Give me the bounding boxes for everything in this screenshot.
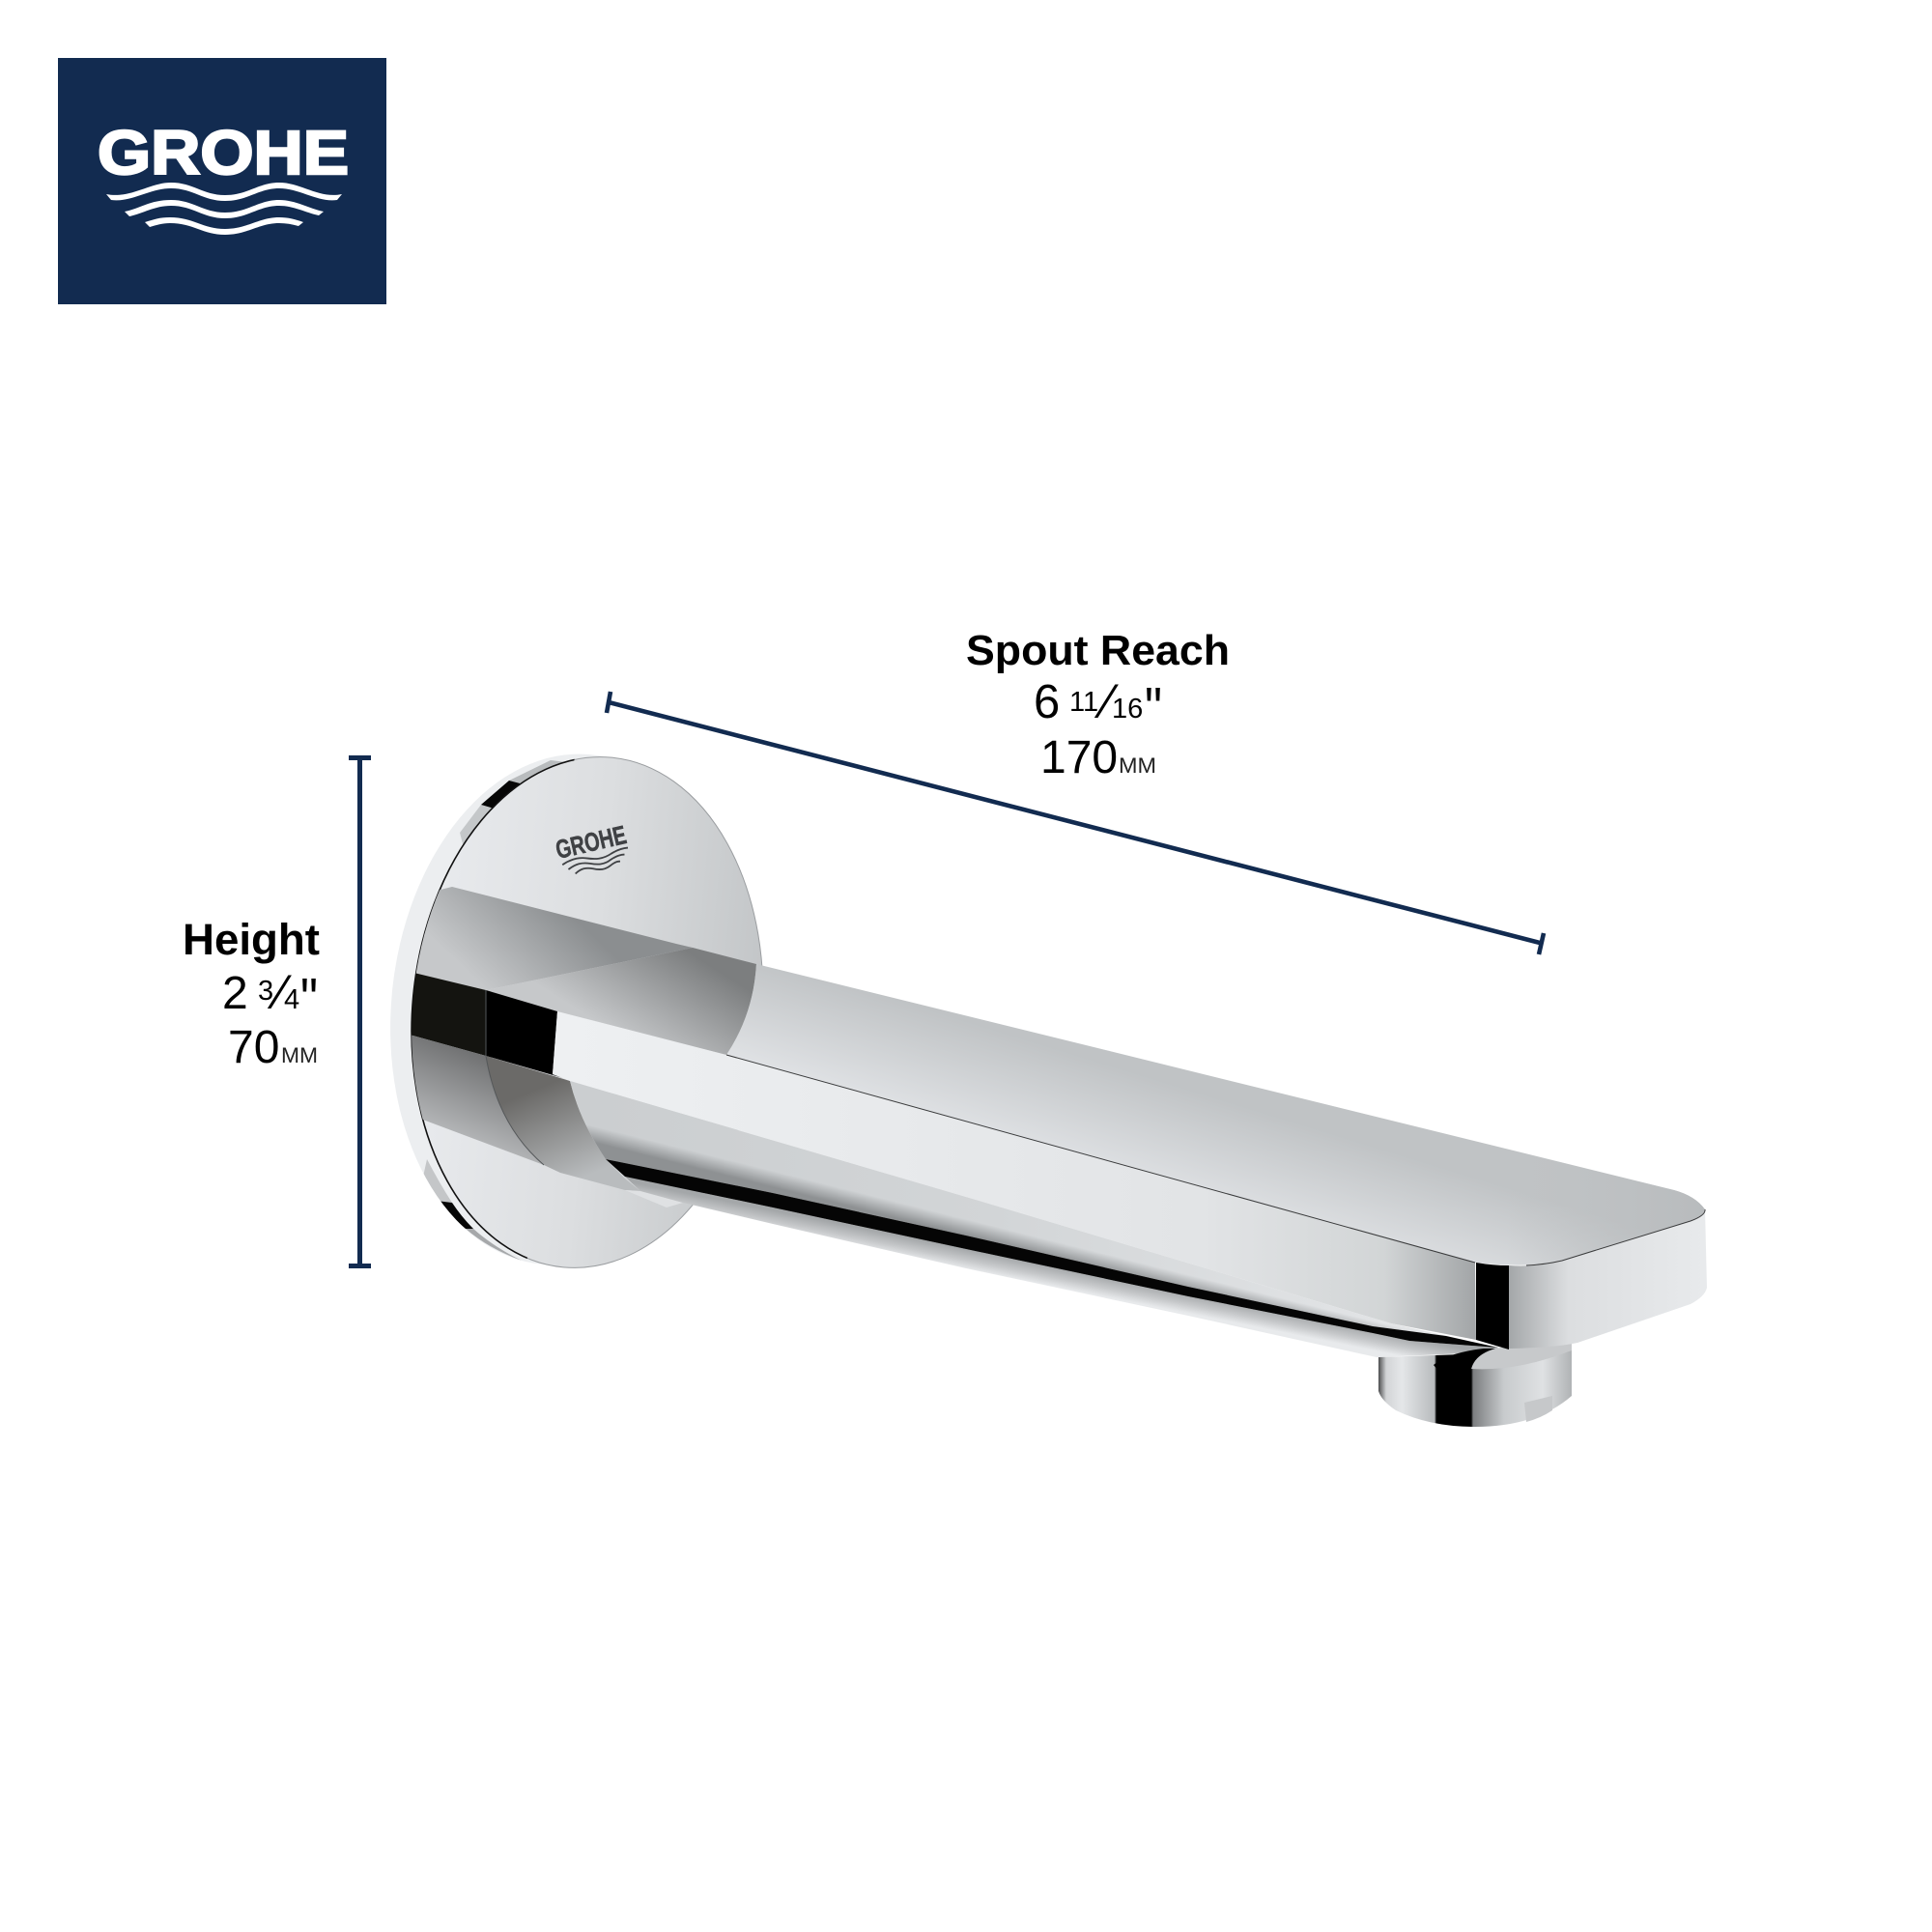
reach in inches: ⁄ bbox=[1094, 674, 1119, 728]
edge lines bbox=[726, 1055, 1705, 1265]
height in inches bbox=[222, 965, 318, 1034]
reach in inches: 16 bbox=[1112, 694, 1143, 724]
spout front face bbox=[553, 1011, 1476, 1340]
reach in inches: 11 bbox=[1069, 687, 1098, 718]
spout lower face bbox=[570, 1081, 1498, 1348]
reach in inches bbox=[1034, 674, 1162, 743]
spout top face bbox=[726, 964, 1705, 1265]
product: chrome tub spout bbox=[368, 738, 1707, 1427]
height dimension bracket bbox=[349, 755, 371, 1268]
plate logo bbox=[553, 820, 633, 878]
reach in inches: 6 bbox=[1034, 676, 1060, 728]
spout underside bbox=[625, 1177, 1498, 1357]
spout end face bbox=[1509, 1209, 1707, 1349]
height in inches: " bbox=[300, 967, 318, 1034]
height in inches: 4 bbox=[284, 984, 299, 1015]
reach in millimetres: MM bbox=[1119, 753, 1156, 778]
height in inches: ⁄ bbox=[267, 965, 292, 1019]
logo wordmark: GROHE bbox=[98, 118, 349, 187]
reach in millimetres: 170 bbox=[1040, 732, 1118, 783]
black corner highlight bbox=[1476, 1263, 1509, 1350]
wall plate rim bbox=[390, 753, 601, 1264]
plate reflections bbox=[406, 887, 756, 1191]
spout reach dimension line bbox=[607, 692, 1544, 954]
logo: GROHE brand panel bbox=[58, 58, 386, 304]
height in millimetres: 70 bbox=[228, 1022, 279, 1073]
height in inches: 2 bbox=[222, 968, 248, 1019]
height in millimetres bbox=[228, 1022, 318, 1073]
lower neck of plate overlap bbox=[625, 1190, 683, 1208]
logo waves bbox=[106, 183, 342, 235]
reach in millimetres bbox=[1040, 732, 1156, 783]
height in millimetres: MM bbox=[281, 1043, 318, 1067]
height in inches: 3 bbox=[258, 976, 273, 1007]
foot aerator bbox=[1378, 1341, 1572, 1427]
height label: Height bbox=[183, 915, 320, 964]
reach in inches: " bbox=[1145, 676, 1162, 743]
spout reach label: Spout Reach bbox=[966, 627, 1230, 674]
height label bbox=[183, 915, 320, 1073]
black shadow slit bbox=[606, 1159, 1498, 1348]
plate dark edge bbox=[411, 759, 575, 1260]
spout reach label bbox=[966, 627, 1230, 783]
wall plate face bbox=[389, 741, 785, 1284]
plate logo: GROHE bbox=[553, 820, 629, 865]
